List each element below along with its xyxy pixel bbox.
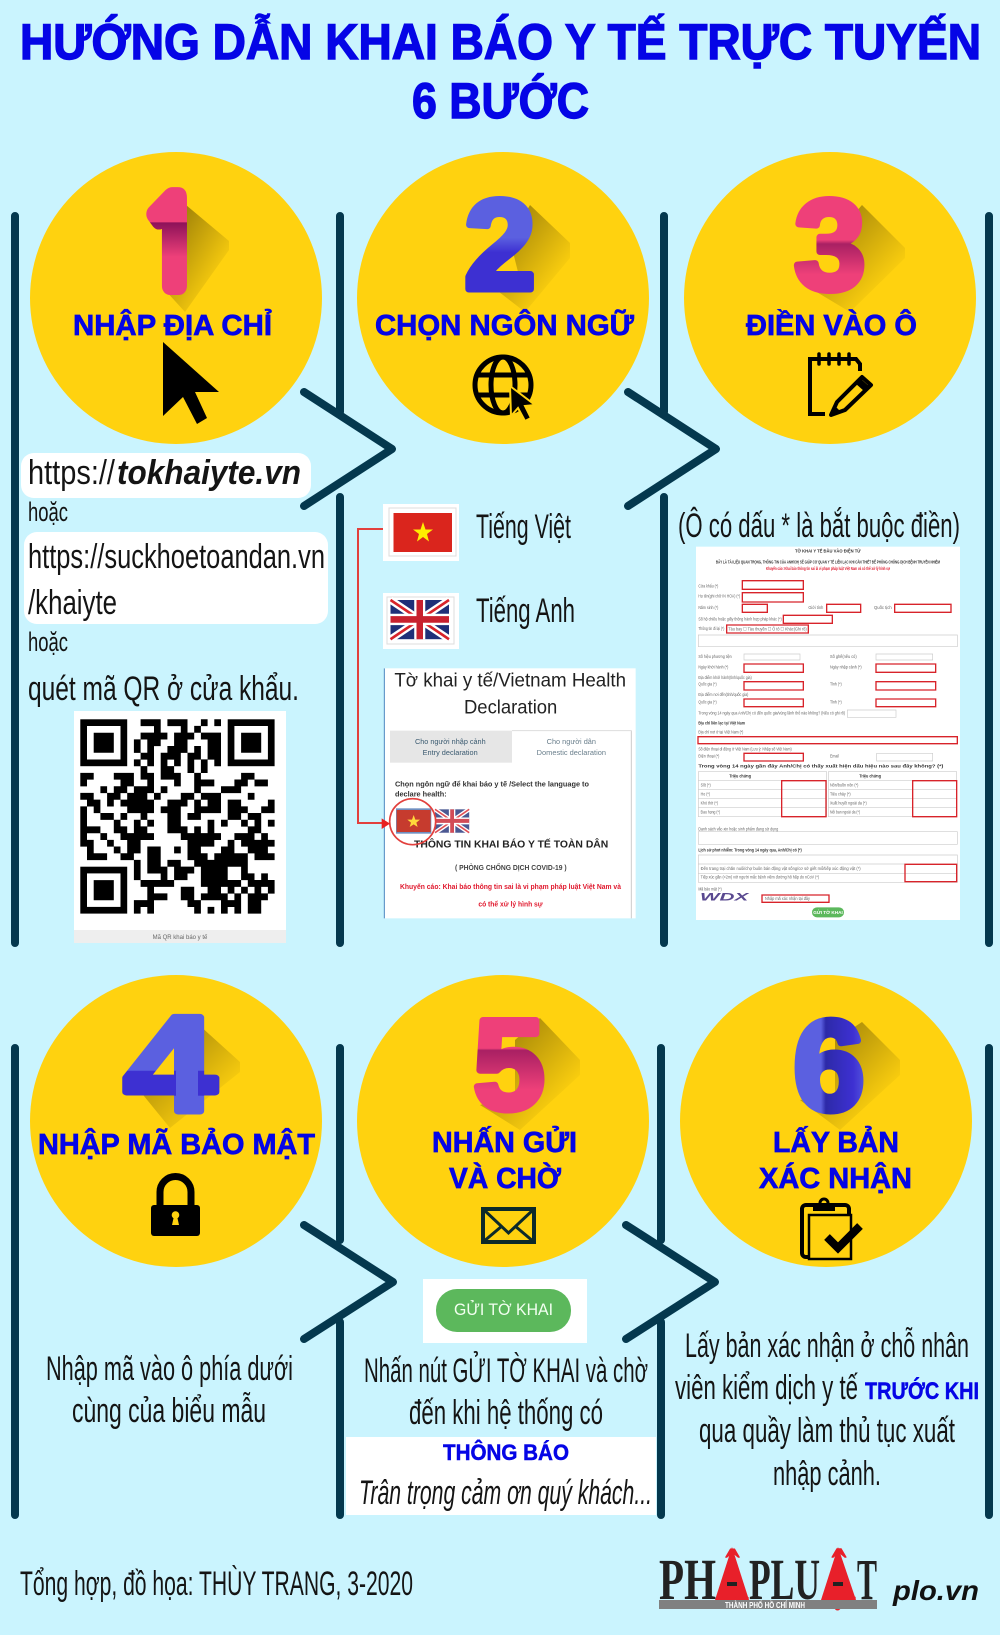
panel: health declaration form screenshot: Ho (*) xyxy=(701,792,710,798)
text block: step 6: nhập cảnh. xyxy=(773,1455,881,1493)
panel: step 5 circle xyxy=(357,975,649,1267)
panel: declaration page screenshot: Chọn ngôn ngữ để khai báo y tế /Select the language to xyxy=(395,780,589,789)
panel: health declaration form screenshot: Tỉnh (*) xyxy=(830,681,842,688)
heading: step 6 xyxy=(759,1125,912,1195)
submit button xyxy=(812,907,844,917)
number 3: 3 xyxy=(794,174,866,317)
panel: health declaration form screenshot: Danh sách vắc-xin hoặc sinh phẩm đang sử dụng xyxy=(698,825,778,832)
heading: step 5: VÀ CHỜ xyxy=(449,1161,561,1195)
panel: health declaration form screenshot: Ngày nhập cảnh (*) xyxy=(830,665,862,671)
panel: health declaration form screenshot: Mã bảo mật (*) xyxy=(698,886,722,892)
panel: declaration page screenshot: Khuyến cáo: Khai báo thông tin sai là vi phạm pháp luật Việt Nam và xyxy=(400,883,621,891)
panel: declaration page screenshot: declare health: xyxy=(395,790,447,799)
text block: step 1 addresses: hoặc xyxy=(28,497,68,527)
panel: health declaration form screenshot: Tỉnh (*) xyxy=(830,698,842,705)
text block: step 6 xyxy=(675,1327,979,1493)
panel: health declaration form screenshot: Đau họng (*) xyxy=(701,810,720,816)
panel: health declaration form screenshot: Năm sinh (*) xyxy=(698,605,719,611)
icon: padlock xyxy=(151,1176,200,1236)
panel: health declaration form screenshot: Điện thoại (*) xyxy=(698,753,720,759)
text block: step 1 addresses: https://suckhoetoandan.vn xyxy=(28,538,325,576)
panel: health declaration form screenshot: Đến trang trại chăn nuôi/chợ buôn bán động vật sống/cơ sở giết mổ/tiếp xúc động vật (*) xyxy=(701,865,861,872)
QR code: Mã QR khai báo y tế xyxy=(153,935,208,941)
heading: step 6: LẤY BẢN xyxy=(773,1125,899,1159)
panel: step 6 circle xyxy=(680,975,972,1267)
panel: health declaration form screenshot: Khó thở (*) xyxy=(701,800,718,807)
text block: step 4: cùng của biểu mẫu xyxy=(72,1392,266,1430)
number 5: 5 xyxy=(473,994,545,1137)
icon: globe with cursor xyxy=(475,357,535,421)
text block: step 5 xyxy=(364,1352,648,1432)
QR code xyxy=(74,711,286,943)
panel: declaration page screenshot: Cho người dân xyxy=(547,739,596,746)
button: send declaration xyxy=(423,1279,587,1343)
panel: health declaration form screenshot: Quốc gia (*) xyxy=(698,682,717,688)
heading: step 1: NHẬP ĐỊA CHỈ xyxy=(73,308,272,342)
icon: UK flag xyxy=(383,593,459,649)
text block: step 1 addresses: quét mã QR ở cửa khẩu. xyxy=(28,670,299,708)
text block: step 1 addresses: hoặc xyxy=(28,627,68,657)
panel: health declaration form screenshot: Tiếp xúc gần (<2m) với người mắc bệnh viêm đường hô hấp do nCoV (*) xyxy=(701,874,819,881)
panel: health declaration form screenshot: Số điện thoại di động ở Việt Nam (Lưu ý: Nhập số Việt Nam) xyxy=(698,746,792,753)
text block: step 4 xyxy=(46,1350,293,1430)
chevron arrow 1 xyxy=(304,392,392,506)
text block: step 4: Nhập mã vào ô phía dưới xyxy=(46,1350,293,1388)
logo: Pháp Luật: THÀNH PHỐ HỒ CHÍ MINH xyxy=(725,1600,805,1610)
panel: health declaration form screenshot: Địa điểm khởi hành(tỉnh/quốc gia) xyxy=(698,674,752,681)
panel: health declaration form screenshot: Ngày khởi hành (*) xyxy=(698,664,729,671)
shadow of number 4 xyxy=(135,1025,240,1128)
notification box: Trân trọng cảm ơn quý khách... xyxy=(359,1474,652,1512)
logo: Pháp Luật xyxy=(659,1547,877,1612)
panel: step 2 language flags: Tiếng Anh xyxy=(476,592,575,630)
title: 6 BƯỚC xyxy=(412,73,589,129)
panel: health declaration form screenshot: Trong vòng 14 ngày qua Anh/Chị có đến quốc gia/vùng lãnh thổ nào không? (Nếu có ghi rõ) xyxy=(698,710,845,717)
logo: Pháp Luật: Â xyxy=(716,1547,749,1612)
text block: step 6: TRƯỚC KHI xyxy=(865,1377,979,1405)
text block: step 5: Nhấn nút GỬI TỜ KHAI và chờ xyxy=(364,1352,648,1390)
panel: health declaration form screenshot: Lịch sử phơi nhiễm: Trong vòng 14 ngày qua, Anh/Chị có (*) xyxy=(698,846,802,853)
number 2: 2 xyxy=(464,174,536,317)
panel: step 1 circle xyxy=(30,152,322,444)
panel: health declaration form screenshot: Quốc tịch xyxy=(874,605,892,611)
panel: declaration page screenshot: Cho người nhập cảnh xyxy=(415,739,486,746)
panel: health declaration form screenshot: Họ tên(ghi chữ IN HOA) (*) xyxy=(698,594,740,600)
number 1: 1 xyxy=(139,185,205,306)
icon: Vietnam flag xyxy=(383,504,459,561)
red arrow head xyxy=(382,818,390,829)
title xyxy=(20,14,981,129)
heading: step 4: NHẬP MÃ BẢO MẬT xyxy=(38,1127,315,1161)
connector arrow to flag xyxy=(358,529,384,823)
panel: health declaration form screenshot: Nôn/buồn nôn (*) xyxy=(830,783,859,789)
icon: cursor xyxy=(163,342,219,424)
submit button: GỬI TỜ KHAI xyxy=(813,908,843,915)
panel: health declaration form screenshot: Nhập mã xác nhận tại đây xyxy=(765,896,810,902)
heading: step 5: NHẤN GỬI xyxy=(432,1125,577,1159)
panel: step 2 language flags: Tiếng Việt xyxy=(476,508,571,546)
panel: health declaration form screenshot: Cửa khẩu (*) xyxy=(698,582,719,589)
panel: health declaration form screenshot: Số hộ chiếu hoặc giấy thông hành hợp pháp khác (*) xyxy=(698,617,782,623)
logo: Pháp Luật: PLU xyxy=(749,1547,820,1612)
text block: step 6: viên kiểm dịch y tế xyxy=(675,1369,858,1407)
icon: notepad with pencil xyxy=(810,354,871,415)
button: send declaration: GỬI TỜ KHAI xyxy=(454,1300,553,1319)
panel: health declaration form screenshot: Xuất huyết ngoài da (*) xyxy=(830,801,867,807)
icon: envelope xyxy=(483,1209,534,1242)
panel: health declaration form screenshot: Địa điểm nơi đến(tỉnh/quốc gia) xyxy=(698,691,749,698)
shadow of number 6 xyxy=(800,1022,900,1130)
shadow of number 2 xyxy=(490,205,570,312)
panel: health declaration form screenshot xyxy=(696,547,960,920)
icon: clipboard with check xyxy=(802,1199,860,1259)
number 6: 6 xyxy=(793,995,865,1138)
heading: step 5 xyxy=(432,1125,577,1195)
panel: health declaration form screenshot: Email xyxy=(830,753,839,759)
panel: health declaration form screenshot: Trong vòng 14 ngày gần đây Anh/Chị có thấy xuất hiện dấu hiệu nào sau đây không? (*) xyxy=(698,763,944,770)
panel: declaration page screenshot: Entry declaration xyxy=(423,750,478,757)
panel: health declaration form screenshot: Số hiệu phương tiện xyxy=(698,654,732,660)
panel: health declaration form screenshot: WDX xyxy=(700,892,751,904)
notification box xyxy=(346,1437,656,1515)
text block: step 1 addresses: https:// xyxy=(28,454,115,492)
shadow of number 1 xyxy=(165,205,229,312)
text block: step 1 addresses: /khaiyte xyxy=(28,584,117,622)
text block: step 1 addresses: tokhaiyte.vn xyxy=(117,454,301,492)
panel: health declaration form screenshot: Giới tính xyxy=(808,605,824,611)
logo: plo.vn: plo.vn xyxy=(892,1575,979,1606)
panel: step 3 circle xyxy=(684,152,976,444)
panel: declaration page screenshot: Tờ khai y tế/Vietnam Health xyxy=(394,671,626,692)
address pill 2 xyxy=(24,532,328,624)
red highlight circle xyxy=(390,799,436,845)
panel: health declaration form screenshot: Quốc gia (*) xyxy=(698,699,717,705)
number 4: 4 xyxy=(124,988,216,1140)
panel: health declaration form screenshot: Tiêu chảy (*) xyxy=(830,792,851,798)
heading: step 3: ĐIỀN VÀO Ô xyxy=(746,308,917,342)
heading: step 2: CHỌN NGÔN NGỮ xyxy=(375,308,635,342)
panel: step 4 circle xyxy=(30,975,322,1267)
shadow of number 5 xyxy=(480,1018,580,1130)
required field highlights xyxy=(698,581,957,902)
chevron arrow 3 xyxy=(304,1225,393,1339)
address pill 1 xyxy=(21,453,311,498)
panel: declaration page screenshot: THÔNG TIN KHAI BÁO Y TẾ TOÀN DÂN xyxy=(414,837,608,850)
panel: health declaration form screenshot: Triệu chứng xyxy=(859,773,881,779)
panel: step 2 circle xyxy=(357,152,649,444)
panel: health declaration form screenshot: Khuyến cáo: Khai báo thông tin sai là vi phạm pháp luật Việt Nam và có thể xử lý hình sự xyxy=(766,565,890,572)
panel: health declaration form screenshot: Tàu bay ☐ Tàu thuyền ☐ Ô tô ☐ Khác(Ghi rõ) xyxy=(728,625,807,632)
panel: declaration page screenshot: Domestic declaration xyxy=(537,750,606,757)
logo: Pháp Luật: T xyxy=(857,1547,877,1612)
panel: declaration page screenshot xyxy=(382,668,636,918)
text block: step 5: đến khi hệ thống có xyxy=(409,1394,603,1432)
panel: health declaration form screenshot: Địa chỉ nơi ở tại Việt Nam (*) xyxy=(698,728,744,735)
notification box: THÔNG BÁO xyxy=(443,1440,569,1465)
panel: declaration page screenshot: Declaration xyxy=(464,697,557,718)
panel: declaration page screenshot: ( PHÒNG CHỐNG DỊCH COVID-19 ) xyxy=(455,862,567,872)
shadow of number 3 xyxy=(805,205,905,312)
logo: Pháp Luật: Ậ xyxy=(822,1547,856,1612)
panel: health declaration form screenshot: Triệu chứng xyxy=(729,773,751,779)
panel: health declaration form screenshot: Địa chỉ liên lạc tại Việt Nam xyxy=(698,720,745,726)
logo: Pháp Luật: PH xyxy=(659,1547,716,1612)
chevron arrow 2 xyxy=(628,392,716,506)
heading: step 6: XÁC NHẬN xyxy=(759,1161,912,1195)
chevron arrow 4 xyxy=(626,1225,715,1339)
panel: health declaration form screenshot: Số ghế(nếu có) xyxy=(830,654,857,660)
footer credit: Tổng hợp, đồ họa: THÙY TRANG, 3-2020 xyxy=(20,1565,413,1603)
panel: health declaration form screenshot: Thông tin đi lại (*) xyxy=(698,626,725,632)
panel: health declaration form screenshot: TỜ KHAI Y TẾ ĐẦU VÀO ĐIỆN TỬ xyxy=(795,547,861,555)
panel: declaration page screenshot: có thể xử lý hình sự xyxy=(478,901,544,909)
panel: step 2 language flags xyxy=(358,504,575,823)
panel: health declaration form screenshot: Sốt (*) xyxy=(701,783,711,789)
stem highlight of number 4 xyxy=(176,1066,198,1098)
panel: health declaration form screenshot: Nổi ban ngoài da (*) xyxy=(830,809,860,816)
text block: step 1 addresses xyxy=(21,453,328,708)
